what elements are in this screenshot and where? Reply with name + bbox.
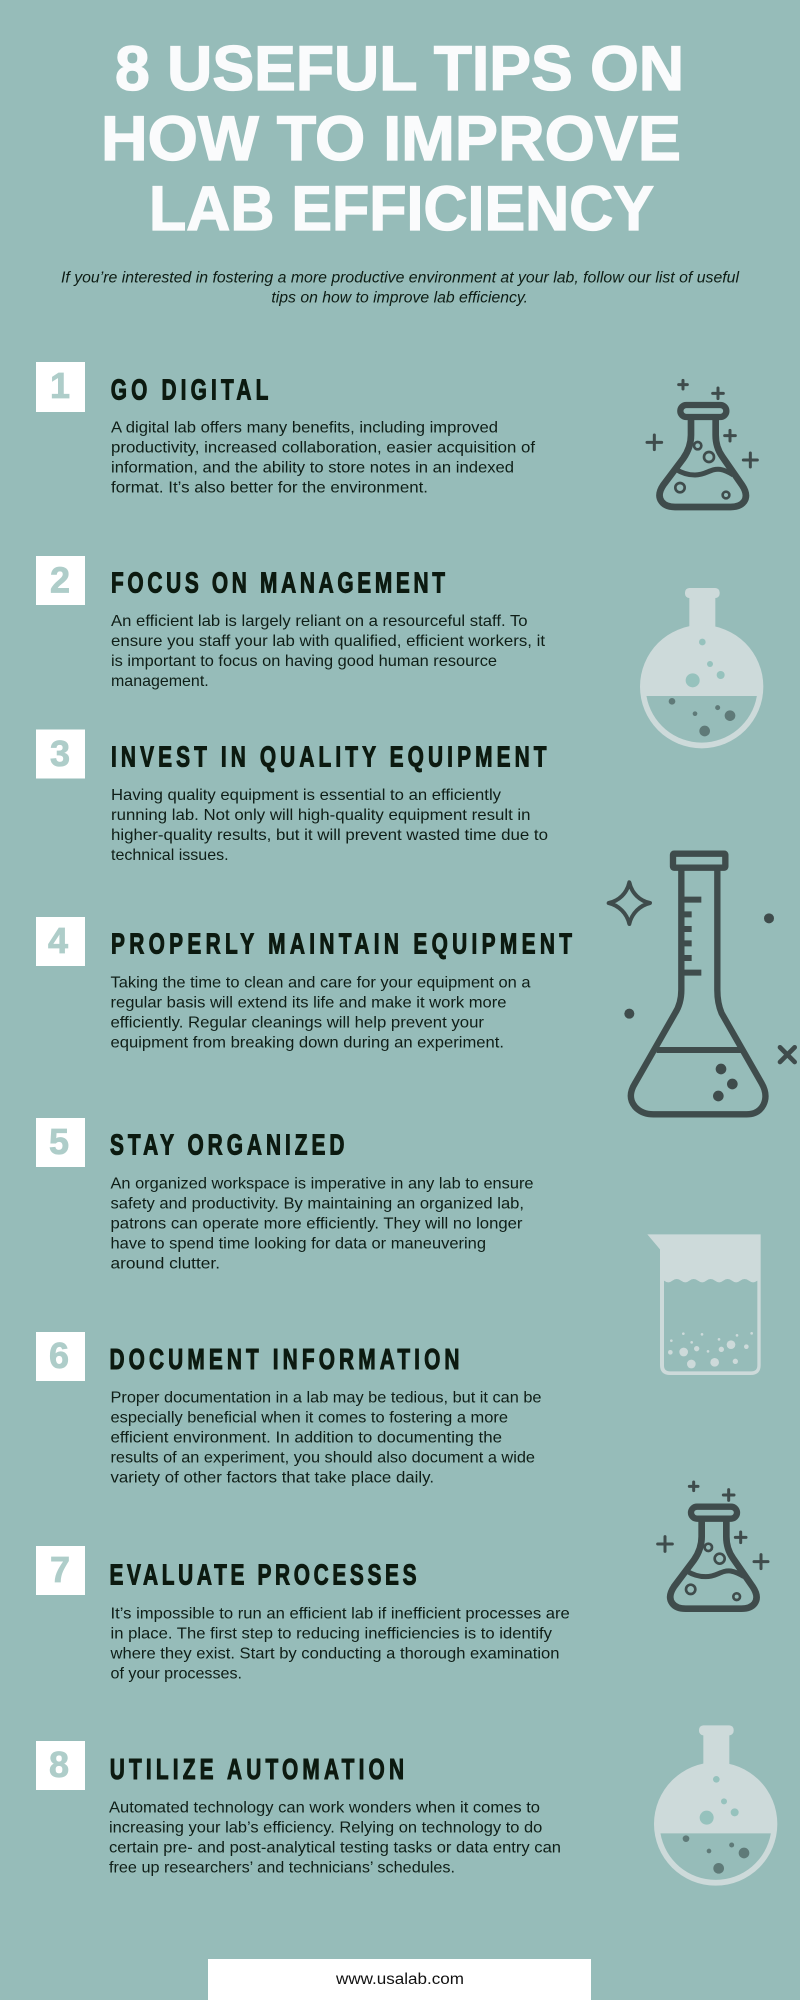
title: LAB EFFICIENCY (149, 174, 654, 244)
body 1: A digital lab offers many benefits, including improved (111, 420, 498, 437)
number badge 1: 1 (50, 365, 70, 406)
tip 3: invest in quality equipment (36, 730, 548, 864)
tip 7: evaluate processes (36, 1546, 570, 1682)
title (101, 34, 684, 244)
number badge 4: 4 (48, 920, 68, 961)
intro text (61, 270, 740, 307)
tip 2: focus on management (36, 556, 546, 690)
footer: website (208, 1959, 591, 2000)
number badge 6: 6 (49, 1335, 69, 1376)
body 7: It’s impossible to run an efficient lab if inefficient processes are (110, 1605, 570, 1622)
number badge 5: 5 (49, 1121, 69, 1162)
body 1: information, and the ability to store notes in an indexed (111, 460, 514, 477)
heading 7: EVALUATE PROCESSES (110, 1559, 417, 1592)
body 5: around clutter. (110, 1255, 220, 1272)
body 7 (109, 1605, 570, 1682)
body 8: increasing your lab’s efficiency. Relying on technology to do (109, 1819, 543, 1836)
heading 6: DOCUMENT INFORMATION (110, 1344, 459, 1376)
number badge 5 (36, 1118, 85, 1167)
tip 8: utilize automation (36, 1741, 561, 1876)
title: HOW TO IMPROVE (101, 104, 681, 174)
body 8: certain pre- and post-analytical testing tasks or data entry can (109, 1839, 561, 1856)
number badge 3 (36, 730, 85, 778)
body 8: free up researchers’ and technicians’ schedules. (109, 1859, 455, 1876)
body 8: Automated technology can work wonders when it comes to (109, 1799, 540, 1816)
number badge 4 (36, 917, 85, 966)
body 2: management. (111, 673, 209, 690)
body 1: format. It’s also better for the environment. (111, 480, 428, 497)
body 8 (109, 1799, 561, 1876)
body 5: patrons can operate more efficiently. They will no longer (110, 1215, 522, 1232)
tip 1: go digital (36, 362, 536, 497)
body 3 (111, 787, 548, 864)
body 6: results of an experiment, you should also document a wide (110, 1449, 535, 1466)
icon: round flask light lower (654, 1725, 777, 1886)
number badge 7 (36, 1546, 85, 1595)
body 4: efficiently. Regular cleanings will help prevent your (110, 1014, 484, 1031)
number badge 2 (36, 556, 85, 605)
body 5: have to spend time looking for data or maneuvering (110, 1235, 486, 1252)
number badge 7: 7 (50, 1549, 70, 1590)
heading 1: GO DIGITAL (111, 374, 268, 406)
footer: website: www.usalab.com (335, 1971, 464, 1988)
body 6: variety of other factors that take place daily. (110, 1469, 434, 1486)
number badge 1 (36, 362, 85, 412)
body 1: productivity, increased collaboration, easier acquisition of (111, 440, 536, 457)
heading 3: INVEST IN QUALITY EQUIPMENT (111, 741, 547, 774)
body 5: An organized workspace is imperative in any lab to ensure (110, 1175, 534, 1192)
body 2 (111, 613, 546, 690)
icon: sparkling flask (647, 380, 757, 507)
body 5 (110, 1175, 534, 1272)
body 5: safety and productivity. By maintaining an organized lab, (110, 1195, 524, 1212)
body 3: Having quality equipment is essential to an efficiently (111, 787, 501, 804)
body 7: in place. The first step to reducing inefficiencies is to identify (110, 1625, 552, 1642)
body 4: regular basis will extend its life and make it work more (110, 994, 506, 1011)
tip 5: stay organized (36, 1118, 534, 1272)
body 3: technical issues. (111, 847, 229, 864)
title: 8 USEFUL TIPS ON (115, 34, 684, 104)
heading 4: PROPERLY MAINTAIN EQUIPMENT (111, 928, 572, 961)
icon: beaker (647, 1234, 761, 1375)
body 4: equipment from breaking down during an experiment. (110, 1034, 504, 1051)
body 7: where they exist. Start by conducting a thorough examination (109, 1645, 560, 1662)
icon: round flask light (640, 588, 763, 748)
body 7: of your processes. (110, 1665, 242, 1682)
number badge 3: 3 (50, 733, 70, 774)
intro text: If you’re interested in fostering a more productive environment at your lab, follow our list of useful (61, 270, 740, 287)
body 6: efficient environment. In addition to documenting the (110, 1429, 502, 1446)
tip 6: document information (36, 1332, 542, 1486)
body 3: running lab. Not only will high-quality equipment result in (111, 807, 530, 824)
intro text: tips on how to improve lab efficiency. (271, 290, 528, 307)
number badge 2: 2 (50, 560, 70, 601)
body 6 (110, 1389, 542, 1486)
tip 4: properly maintain equipment (36, 917, 572, 1051)
heading 2: FOCUS ON MANAGEMENT (111, 567, 445, 600)
number badge 6 (36, 1332, 85, 1381)
body 3: higher-quality results, but it will prevent wasted time due to (111, 827, 548, 844)
heading 5: STAY ORGANIZED (110, 1129, 345, 1162)
icon: sparkling flask small (658, 1482, 768, 1609)
body 2: ensure you staff your lab with qualified, efficient workers, it (111, 633, 546, 650)
heading 8: UTILIZE AUTOMATION (110, 1754, 404, 1786)
body 4: Taking the time to clean and care for your equipment on a (110, 974, 531, 991)
body 6: Proper documentation in a lab may be tedious, but it can be (110, 1389, 542, 1406)
body 2: An efficient lab is largely reliant on a resourceful staff. To (111, 613, 528, 630)
body 2: is important to focus on having good human resource (111, 653, 497, 670)
number badge 8 (36, 1741, 85, 1790)
body 4 (110, 974, 531, 1051)
body 6: especially beneficial when it comes to fostering a more (110, 1409, 508, 1426)
body 1 (111, 420, 536, 497)
number badge 8: 8 (49, 1744, 69, 1785)
icon: tall graduated flask (609, 854, 795, 1114)
